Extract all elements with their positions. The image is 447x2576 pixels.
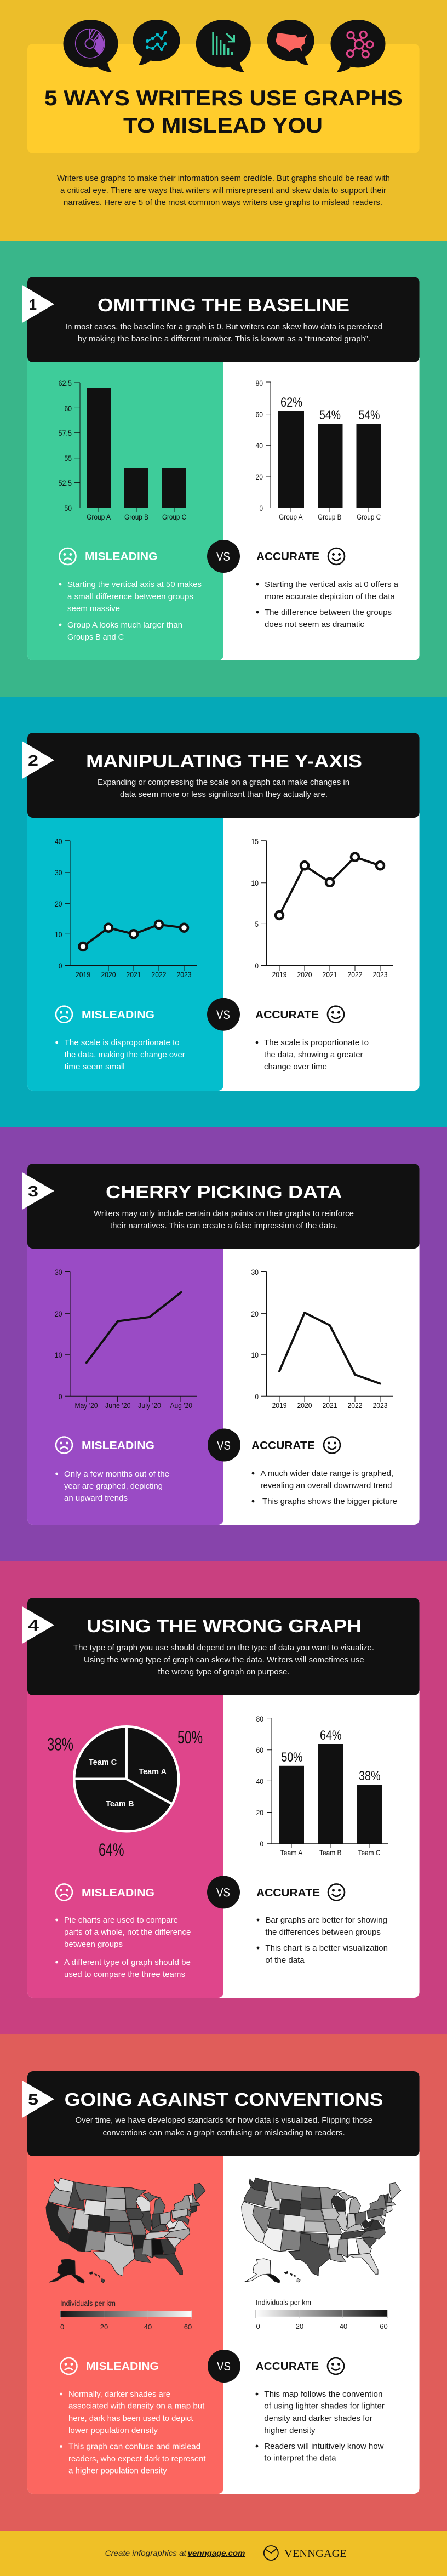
bar chart: misleading truncated xyxy=(58,379,193,521)
accurate label: ACCURATE xyxy=(256,2361,319,2373)
accurate bullets xyxy=(256,2390,385,2463)
misleading bullets xyxy=(55,1470,169,1503)
heading: OMITTING THE BASELINE xyxy=(98,295,349,315)
accurate bullets: of the data xyxy=(265,1956,305,1965)
heading: 3 xyxy=(28,1183,38,1200)
misleading bullets: Starting the vertical axis at 50 makes xyxy=(67,580,202,589)
accurate bullets: change over time xyxy=(264,1063,327,1072)
line chart: selected months: July '20 xyxy=(138,1401,161,1410)
bar chart: accurate teams: Team B xyxy=(319,1848,342,1857)
icon: happy face xyxy=(328,1884,345,1900)
accurate bullets: The difference between the groups xyxy=(265,608,392,617)
heading: USING THE WRONG GRAPH xyxy=(87,1616,362,1636)
line chart: selected months: June '20 xyxy=(105,1401,131,1410)
bar chart: misleading truncated: 60 xyxy=(65,404,72,413)
line chart: misleading scale: 2021 xyxy=(126,970,141,979)
footer: venngage.com xyxy=(188,2549,245,2557)
misleading bullets: the data, making the change over xyxy=(65,1051,185,1059)
heading xyxy=(22,733,420,818)
accurate bullets: This chart is a better visualization xyxy=(265,1944,388,1953)
bar chart: accurate zero baseline: 20 xyxy=(255,472,263,481)
pie chart: misleading: 50% xyxy=(177,1728,203,1747)
accurate label: ACCURATE xyxy=(256,1887,320,1899)
intro text: Writers use graphs to make their information seem credible. But graphs should be read with xyxy=(57,174,390,183)
line chart: full range: 0 xyxy=(255,1392,259,1401)
heading xyxy=(22,1164,420,1249)
accurate bullets: This map follows the convention xyxy=(264,2390,382,2399)
map: conventional shading xyxy=(242,2178,401,2283)
pie chart: misleading: 38% xyxy=(47,1734,73,1754)
icon: happy face xyxy=(328,2358,344,2374)
line chart: selected months: 20 xyxy=(55,1309,62,1318)
vs badge: VS xyxy=(216,1885,230,1900)
line chart: selected months: May '20 xyxy=(74,1401,98,1410)
line chart: misleading scale: 2022 xyxy=(151,970,167,979)
legend: inverted: 40 xyxy=(144,2323,152,2331)
line chart: misleading scale: 30 xyxy=(55,868,62,877)
icon: happy face xyxy=(324,1437,340,1454)
icon: US map bubble xyxy=(267,20,314,65)
heading: In most cases, the baseline for a graph is 0. But writers can skew how data is perceived xyxy=(65,323,382,332)
heading: 2 xyxy=(28,752,38,769)
misleading label: MISLEADING xyxy=(82,1887,154,1899)
line chart: selected months xyxy=(55,1268,197,1410)
misleading bullets: time seem small xyxy=(65,1063,125,1072)
bar chart: accurate zero baseline: Group C xyxy=(357,512,381,521)
misleading bullets: year are graphed, depicting xyxy=(64,1482,163,1491)
icon: sad face xyxy=(56,1884,72,1900)
misleading bullets: readers, who expect dark to represent xyxy=(68,2455,206,2464)
bar chart: accurate teams: 20 xyxy=(256,1808,263,1817)
accurate bullets: Bar graphs are better for showing xyxy=(265,1916,387,1925)
bar chart: accurate zero baseline: Group A xyxy=(279,512,303,521)
title xyxy=(44,87,403,138)
heading: 5 xyxy=(28,2091,38,2108)
misleading bullets: a small difference between groups xyxy=(67,592,193,601)
line chart: accurate scale: 2019 xyxy=(272,970,287,979)
misleading bullets: lower population density xyxy=(68,2426,158,2435)
heading: the wrong type of graph on purpose. xyxy=(158,1668,289,1677)
bar chart: accurate teams: 64% xyxy=(320,1728,342,1743)
heading: MANIPULATING THE Y-AXIS xyxy=(86,751,362,771)
bar chart: accurate zero baseline: 54% xyxy=(358,408,380,423)
icon: donut chart bubble xyxy=(64,20,118,72)
line chart: selected months: 30 xyxy=(55,1268,62,1276)
accurate bullets: revealing an overall downward trend xyxy=(261,1481,392,1490)
heading: Writers may only include certain data points on their graphs to reinforce xyxy=(94,1210,354,1218)
legend: conventional: 0 xyxy=(256,2322,260,2330)
icon: sad face xyxy=(56,1437,72,1454)
line chart: misleading scale: 2019 xyxy=(76,970,90,979)
misleading bullets xyxy=(59,580,202,642)
icon: sad face xyxy=(56,1006,72,1023)
accurate bullets: Readers will intuitively know how xyxy=(264,2442,384,2451)
line chart: accurate scale: 2022 xyxy=(347,970,363,979)
line chart: full range: 10 xyxy=(251,1350,259,1359)
heading xyxy=(22,1598,420,1695)
bar chart: accurate zero baseline: 0 xyxy=(260,504,263,512)
line chart: accurate scale: 15 xyxy=(251,837,259,846)
heading: their narratives. This can create a false impression of the data. xyxy=(110,1222,337,1230)
misleading bullets xyxy=(55,1039,185,1072)
panel: misleading side xyxy=(27,277,224,660)
misleading bullets xyxy=(55,1916,191,1979)
accurate bullets: The scale is proportionate to xyxy=(264,1039,369,1047)
heading: GOING AGAINST CONVENTIONS xyxy=(65,2089,383,2110)
bar chart: accurate zero baseline: 62% xyxy=(280,395,302,410)
accurate bullets: does not seem as dramatic xyxy=(265,620,364,629)
map: inverted shading xyxy=(46,2178,205,2283)
accurate bullets: the data, showing a greater xyxy=(264,1051,363,1059)
line chart: accurate scale: 2021 xyxy=(322,970,337,979)
bar chart: misleading truncated: 55 xyxy=(65,454,72,463)
bar chart: accurate teams: 40 xyxy=(256,1777,263,1786)
misleading bullets: seem massive xyxy=(67,605,120,613)
legend: conventional: 40 xyxy=(340,2322,347,2330)
misleading bullets: an upward trends xyxy=(64,1494,128,1503)
heading: CHERRY PICKING DATA xyxy=(106,1182,342,1202)
line chart: full range: 2023 xyxy=(373,1401,388,1410)
heading: Over time, we have developed standards for how data is visualized. Flipping those xyxy=(76,2116,373,2125)
bar chart: misleading truncated: 52.5 xyxy=(58,478,72,487)
accurate bullets: Starting the vertical axis at 0 offers a xyxy=(265,580,399,589)
footer: VENNGAGE xyxy=(284,2548,347,2560)
accurate label: ACCURATE xyxy=(251,1440,314,1452)
icon: venngage logo xyxy=(264,2546,278,2560)
misleading label: MISLEADING xyxy=(85,551,158,563)
heading: The type of graph you use should depend on the type of data you want to visualize. xyxy=(73,1644,374,1652)
line chart: misleading scale xyxy=(55,837,197,979)
icon: line chart bubble xyxy=(133,20,180,65)
misleading bullets: Groups B and C xyxy=(67,633,124,642)
misleading bullets: This graph can confuse and mislead xyxy=(68,2442,200,2451)
vs badge: VS xyxy=(217,1439,231,1452)
panel: title card xyxy=(27,44,420,153)
vs badge xyxy=(208,2350,240,2383)
icon: sad face xyxy=(59,548,76,565)
line chart: accurate scale: 2020 xyxy=(297,970,312,979)
bar chart: accurate zero baseline: 60 xyxy=(255,410,263,419)
misleading bullets xyxy=(60,2390,205,2475)
line chart: accurate scale xyxy=(251,837,393,979)
heading: conventions can make a graph confusing or misleading to readers. xyxy=(103,2129,345,2138)
accurate bullets: to interpret the data xyxy=(264,2454,336,2463)
accurate bullets: more accurate depiction of the data xyxy=(265,592,396,601)
vs badge xyxy=(207,1876,240,1908)
misleading label: MISLEADING xyxy=(82,1440,154,1452)
misleading bullets: A different type of graph should be xyxy=(64,1958,191,1967)
misleading bullets: associated with density on a map but xyxy=(68,2402,204,2410)
footer xyxy=(0,2531,447,2576)
bar chart: accurate teams: 50% xyxy=(282,1750,302,1765)
line chart: misleading scale: 0 xyxy=(59,961,62,970)
icons: speech bubble row xyxy=(64,20,386,72)
panel: section 2 manipulating the y-axis xyxy=(0,697,447,1127)
pie chart: misleading: Team A xyxy=(139,1768,167,1776)
misleading bullets: Pie charts are used to compare xyxy=(64,1916,178,1925)
intro text: a critical eye. There are ways that writers will misrepresent and skew data to support their xyxy=(60,186,386,195)
title: TO MISLEAD YOU xyxy=(123,114,323,138)
line chart: accurate scale: 5 xyxy=(255,920,259,928)
line chart: full range: 20 xyxy=(251,1309,259,1318)
legend: conventional: Individuals per km xyxy=(256,2299,311,2306)
line chart: full range: 2022 xyxy=(347,1401,363,1410)
bar chart: accurate teams: 38% xyxy=(359,1769,380,1783)
line chart: selected months: 10 xyxy=(55,1350,62,1359)
vs badge: VS xyxy=(217,2360,231,2373)
icon: falling bars bubble xyxy=(196,20,251,72)
line chart: selected months: Aug '20 xyxy=(170,1401,192,1410)
misleading bullets: The scale is disproportionate to xyxy=(65,1039,180,1047)
line chart: full range: 2021 xyxy=(322,1401,337,1410)
heading: Using the wrong type of graph can skew the data. Writers will sometimes use xyxy=(84,1656,364,1665)
bar chart: accurate zero baseline xyxy=(255,379,388,521)
icon: happy face xyxy=(328,548,345,565)
line chart: misleading scale: 40 xyxy=(55,837,62,846)
accurate bullets: density and darker shades for xyxy=(264,2414,373,2423)
bar chart: misleading truncated: 57.5 xyxy=(58,429,72,437)
accurate label: ACCURATE xyxy=(255,1009,319,1021)
misleading label: MISLEADING xyxy=(86,2361,159,2373)
line chart: full range: 30 xyxy=(251,1268,259,1276)
line chart: full range: 2020 xyxy=(297,1401,312,1410)
bar chart: misleading truncated: 50 xyxy=(65,504,72,512)
misleading bullets: Normally, darker shades are xyxy=(68,2390,170,2399)
legend: inverted: 0 xyxy=(60,2323,64,2331)
bar chart: misleading truncated: Group C xyxy=(162,512,186,521)
footer: Create infographics at xyxy=(105,2549,187,2557)
bar chart: accurate teams xyxy=(256,1714,388,1857)
legend: inverted: 20 xyxy=(100,2323,108,2331)
legend: conventional: 20 xyxy=(296,2322,303,2330)
icon: sad face xyxy=(60,2358,77,2374)
accurate bullets xyxy=(256,1039,369,1072)
heading: Expanding or compressing the scale on a graph can make changes in xyxy=(98,778,349,787)
vs badge xyxy=(207,540,240,573)
heading: 1 xyxy=(29,296,37,313)
misleading bullets: here, dark has been used to depict xyxy=(68,2414,193,2423)
bar chart: accurate teams: Team C xyxy=(358,1848,380,1857)
pie chart: misleading xyxy=(47,1726,203,1860)
accurate bullets xyxy=(257,1916,388,1965)
accurate bullets xyxy=(256,580,399,629)
heading xyxy=(22,2071,420,2156)
line chart: full range xyxy=(251,1268,393,1410)
bar chart: misleading truncated: Group A xyxy=(87,512,111,521)
panel: section 5 going against conventions xyxy=(0,2034,447,2531)
heading xyxy=(22,277,420,362)
vs badge xyxy=(207,998,240,1031)
panel: section 3 cherry picking data xyxy=(0,1127,447,1561)
bar chart: accurate zero baseline: Group B xyxy=(318,512,341,521)
intro text xyxy=(57,174,390,207)
bar chart: accurate teams: 0 xyxy=(260,1839,263,1848)
panel: misleading side xyxy=(27,1598,224,1998)
vs badge: VS xyxy=(216,550,230,563)
line chart: misleading scale: 2023 xyxy=(176,970,192,979)
line chart: full range: 2019 xyxy=(272,1401,287,1410)
bar chart: accurate zero baseline: 80 xyxy=(255,379,263,387)
line chart: accurate scale: 2023 xyxy=(373,970,388,979)
title: 5 WAYS WRITERS USE GRAPHS xyxy=(44,87,403,110)
misleading bullets: used to compare the three teams xyxy=(64,1970,185,1979)
misleading bullets: Only a few months out of the xyxy=(64,1470,169,1479)
misleading bullets: between groups xyxy=(64,1940,123,1949)
line chart: accurate scale: 0 xyxy=(255,961,259,970)
bar chart: misleading truncated: 62.5 xyxy=(58,379,72,387)
vs badge: VS xyxy=(216,1008,230,1022)
accurate bullets: the differences between groups xyxy=(265,1928,381,1937)
panel: intro section background xyxy=(0,0,447,241)
legend: inverted: 60 xyxy=(184,2323,192,2331)
line chart: selected months: 0 xyxy=(59,1392,62,1401)
line chart: misleading scale: 20 xyxy=(55,899,62,908)
bar chart: accurate zero baseline: 40 xyxy=(255,441,263,450)
accurate bullets: A much wider date range is graphed, xyxy=(261,1469,393,1478)
pie chart: misleading: 64% xyxy=(99,1840,124,1860)
accurate bullets: of using lighter shades for lighter xyxy=(264,2402,385,2410)
bar chart: accurate teams: Team A xyxy=(280,1848,303,1857)
misleading label: MISLEADING xyxy=(82,1009,154,1021)
legend: inverted xyxy=(60,2299,192,2331)
legend: conventional: 60 xyxy=(380,2322,388,2330)
panel: section 4 using the wrong graph xyxy=(0,1561,447,2034)
accurate bullets xyxy=(252,1469,397,1506)
pie chart: misleading: Team C xyxy=(89,1758,117,1767)
panel: misleading side xyxy=(27,1164,224,1525)
line chart: misleading scale: 2020 xyxy=(101,970,116,979)
legend: inverted: Individuals per km xyxy=(60,2299,116,2307)
bar chart: misleading truncated: Group B xyxy=(124,512,148,521)
vs badge xyxy=(208,1428,240,1461)
bar chart: accurate teams: 80 xyxy=(256,1714,263,1723)
icon: happy face xyxy=(328,1006,344,1023)
misleading bullets: a higher population density xyxy=(68,2466,167,2475)
accurate label: ACCURATE xyxy=(256,551,319,563)
heading: 4 xyxy=(28,1617,39,1634)
accurate bullets: This graphs shows the bigger picture xyxy=(262,1497,397,1506)
heading: by making the baseline a different number. This is known as a “truncated graph”. xyxy=(78,335,370,344)
legend: conventional xyxy=(256,2299,388,2330)
panel: misleading side xyxy=(27,733,224,1091)
heading: data seem more or less significant than they actually are. xyxy=(120,790,328,799)
line chart: accurate scale: 10 xyxy=(251,879,259,887)
misleading bullets: Group A looks much larger than xyxy=(67,621,182,630)
intro text: narratives. Here are 5 of the most common ways writers use graphs to mislead readers. xyxy=(64,198,382,207)
panel: section 1 omitting the baseline xyxy=(0,241,447,697)
line chart: misleading scale: 10 xyxy=(55,930,62,939)
misleading bullets: parts of a whole, not the difference xyxy=(64,1928,191,1937)
panel: misleading side xyxy=(27,2071,224,2494)
pie chart: misleading: Team B xyxy=(106,1800,134,1809)
bar chart: accurate teams: 60 xyxy=(256,1746,263,1754)
bar chart: accurate zero baseline: 54% xyxy=(319,408,341,423)
icon: network bubble xyxy=(331,20,386,72)
accurate bullets: higher density xyxy=(264,2426,316,2435)
